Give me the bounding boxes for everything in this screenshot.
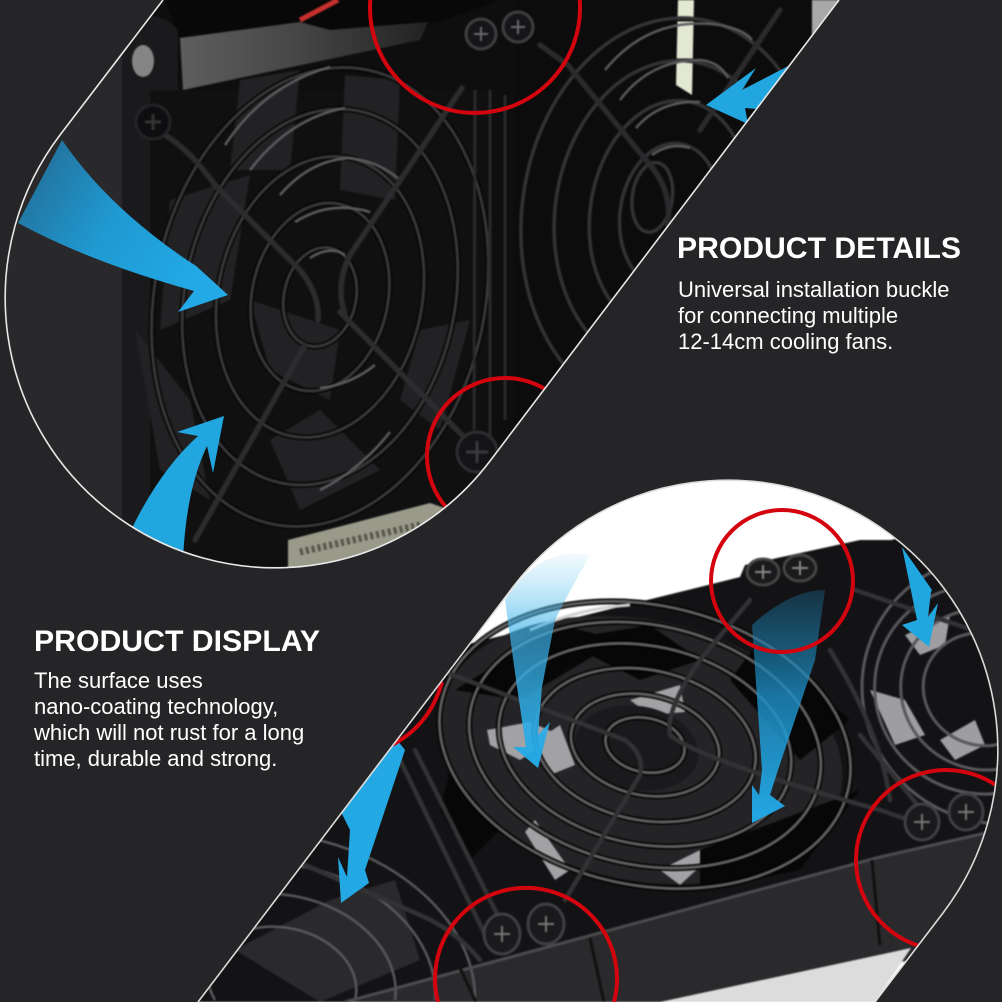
red circle bottom (435, 888, 617, 1002)
side bracket (122, 16, 178, 560)
left fan cross wires (165, 88, 462, 540)
red circle top (711, 510, 853, 652)
left fan guard ring shadows (148, 72, 488, 529)
left fan blades (235, 880, 420, 1002)
ring highlights (225, 67, 400, 490)
arrow: airflow lower (130, 416, 224, 560)
main fan guard rings (437, 599, 853, 891)
guard wires (305, 590, 1002, 960)
left fan guard rings (150, 66, 489, 528)
arrow: airflow middle (752, 590, 825, 823)
white floor (660, 948, 911, 1002)
housing blocks (460, 860, 880, 1002)
description: product details: Universal installation buckle (678, 277, 949, 302)
screws: right pair (905, 794, 983, 840)
light strip (676, 0, 694, 95)
lower housing panel (345, 830, 1002, 1002)
arrow: airflow left (18, 140, 228, 312)
description: product details (678, 277, 949, 354)
lower screw (457, 432, 497, 472)
housing edge (345, 832, 990, 1002)
text block: product display (33, 625, 320, 771)
hub (576, 705, 698, 790)
fan housing (190, 513, 1002, 1002)
centre bracket (474, 90, 505, 440)
red circle lower (425, 376, 546, 508)
text block: product details (677, 232, 961, 354)
description: product display: which will not rust for a long (33, 720, 304, 745)
panel outline: bottom-right (198, 480, 998, 1002)
panel outline: top-left (5, 0, 839, 568)
heading: product display: PRODUCT DISPLAY (34, 625, 320, 658)
panel: bottom-right photo of fans (199, 481, 997, 1002)
arrow: airflow top right (706, 66, 788, 123)
right fan guard rings (862, 556, 1000, 824)
mounting wall (6, 55, 122, 520)
description: product display (33, 668, 304, 771)
bracket hole (132, 45, 154, 77)
right fan cross wires (540, 10, 780, 225)
red circle top (370, 0, 580, 113)
description: product display: time, durable and strong. (34, 746, 277, 771)
red wire (300, 0, 338, 20)
arrow: airflow right (902, 547, 938, 647)
arrow: airflow upper left (505, 553, 590, 768)
description: product details: 12-14cm cooling fans. (678, 329, 893, 354)
bracket screw (136, 105, 170, 139)
top-right corner (812, 0, 840, 36)
right fan highlights (605, 23, 752, 155)
screws: top pair (747, 555, 816, 585)
panel: top-left photo of fans (0, 0, 844, 580)
right fan guard rings (518, 15, 782, 365)
heading: product details: PRODUCT DETAILS (677, 232, 961, 265)
main fan guard ring shadows (436, 597, 854, 892)
arrow: airflow bottom left (338, 740, 405, 903)
description: product details: for connecting multiple (678, 303, 898, 328)
main fan dark blades (440, 625, 860, 890)
main fan light blades (487, 685, 705, 885)
left fan guard rings (89, 833, 475, 1000)
description: product display: The surface uses (34, 668, 203, 693)
description: product display: nano-coating technology, (34, 694, 278, 719)
main fan disc (442, 616, 842, 884)
screws: bottom pair (484, 904, 564, 954)
left fan housing (150, 90, 160, 494)
rating label (287, 502, 444, 567)
grey top bar (180, 22, 428, 90)
red arc left (392, 682, 442, 745)
red circle right (856, 770, 1000, 950)
screws top (466, 12, 533, 49)
top cable area (165, 0, 500, 40)
left fan blades (135, 70, 470, 510)
top highlight (530, 605, 630, 630)
right fan light blades (870, 615, 985, 760)
right fan housing (515, 0, 840, 470)
